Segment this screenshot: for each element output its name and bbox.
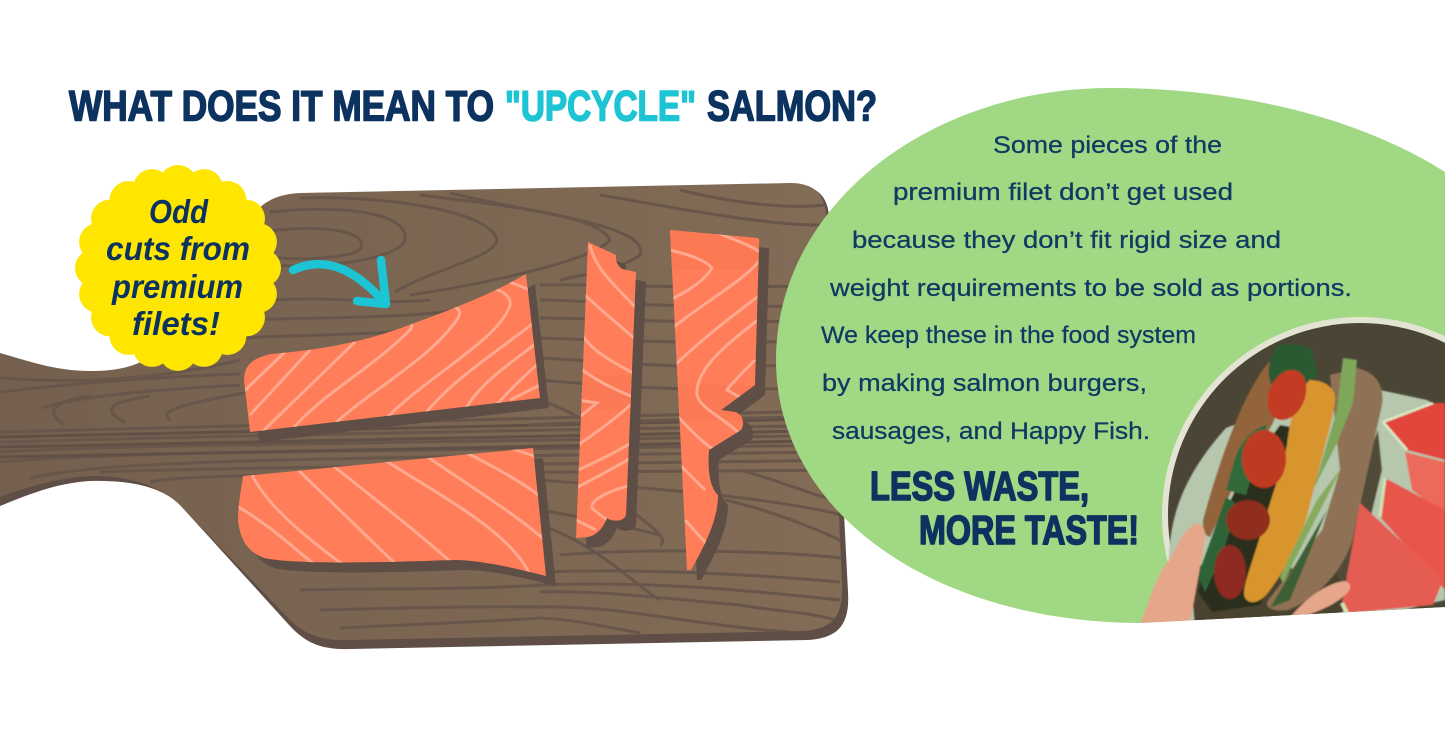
salmon piece: lower left: [235, 448, 546, 576]
badge: odd cuts: filets!: [132, 305, 220, 342]
title: SALMON?: [707, 82, 877, 130]
arrow: [293, 260, 386, 304]
explanation text: weight requirements to be sold as portions.: [829, 275, 1352, 302]
explanation text: sausages, and Happy Fish.: [832, 418, 1150, 445]
badge: odd cuts: cuts from: [106, 230, 250, 267]
title: "UPCYCLE": [505, 82, 696, 130]
slogan: LESS WASTE,: [870, 463, 1089, 509]
title: [69, 82, 877, 130]
cutting board: [0, 183, 860, 649]
slogan: [870, 463, 1139, 553]
explanation text: Some pieces of the: [993, 132, 1222, 159]
photo: salmon sausage on plate: [1140, 317, 1445, 623]
salmon piece: tall middle: [576, 242, 636, 538]
badge: odd cuts: premium: [111, 268, 243, 305]
badge: odd cuts: Odd: [149, 193, 209, 230]
salmon piece: tall right: [670, 230, 760, 570]
explanation text: [821, 132, 1352, 445]
slogan: MORE TASTE!: [919, 507, 1139, 553]
explanation text: premium filet don’t get used: [893, 179, 1233, 206]
explanation text: We keep these in the food system: [821, 322, 1196, 349]
title: WHAT DOES IT MEAN TO: [69, 82, 494, 130]
salmon piece: upper left: [240, 274, 540, 432]
explanation text: because they don’t fit rigid size and: [852, 227, 1281, 254]
badge: odd cuts: [75, 165, 281, 371]
panel: green explanation blob: [776, 88, 1445, 623]
explanation text: by making salmon burgers,: [822, 370, 1147, 397]
infographic canvas: [0, 88, 1445, 650]
